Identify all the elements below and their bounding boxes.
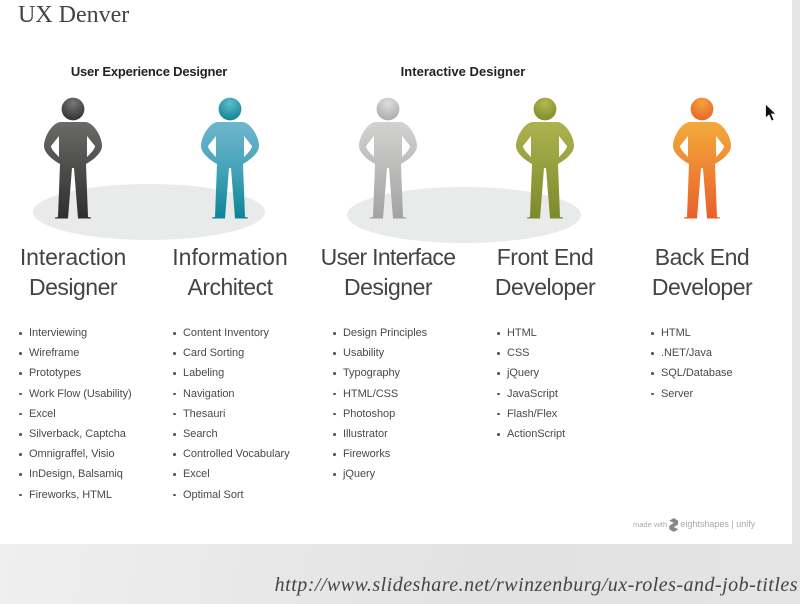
- skill list: back end developer: HTML: [661, 327, 691, 339]
- role name: interaction designer: [20, 244, 126, 300]
- figure: user interface designer: [359, 98, 417, 218]
- skill list: interaction designer: [19, 327, 132, 501]
- credit: made with eightshapes unify: made with eightshapes | unify: [633, 519, 755, 529]
- skill list: user interface designer: [333, 327, 427, 480]
- skill list: information architect: Optimal Sort: [183, 489, 244, 501]
- figure: front end developer: [516, 98, 574, 218]
- skill list: information architect: Search: [183, 428, 218, 440]
- skill list: interaction designer: Excel: [29, 408, 56, 420]
- skill list: back end developer: SQL/Database: [661, 367, 733, 379]
- figure: interaction designer: [44, 98, 102, 218]
- source url caption: http://www.slideshare.net/rwinzenburg/ux-roles-and-job-titles: [275, 574, 798, 596]
- skill list: interaction designer: Omnigraffel, Visio: [29, 448, 115, 460]
- skill list: front end developer: ActionScript: [507, 428, 565, 440]
- role name: front end developer: [495, 244, 596, 300]
- role name: information architect: Architect: [188, 274, 272, 300]
- role name: back end developer: [652, 244, 752, 300]
- skill list: information architect: Controlled Vocabulary: [183, 448, 290, 460]
- skill list: front end developer: Flash/Flex: [507, 408, 557, 420]
- skill list: front end developer: HTML: [507, 327, 537, 339]
- skill list: information architect: Labeling: [183, 367, 224, 379]
- illustration: figures and ground shadows: [33, 98, 731, 243]
- skill list: interaction designer: Wireframe: [29, 347, 79, 359]
- skill list: user interface designer: jQuery: [343, 468, 375, 480]
- skill list: front end developer: JavaScript: [507, 388, 558, 400]
- role name: front end developer: Front End: [497, 244, 593, 270]
- skill list: interaction designer: Fireworks, HTML: [29, 489, 112, 501]
- skill list: back end developer: .NET/Java: [661, 347, 712, 359]
- role name: back end developer: Back End: [655, 244, 749, 270]
- skill list: back end developer: [651, 327, 733, 400]
- skill list: interaction designer: InDesign, Balsamiq: [29, 468, 123, 480]
- heading: user experience designer: User Experience Designer: [71, 64, 227, 79]
- skill list: information architect: Excel: [183, 468, 210, 480]
- role name: user interface designer: User Interface: [321, 244, 455, 270]
- role name: user interface designer: Designer: [344, 274, 432, 300]
- skill list: interaction designer: Prototypes: [29, 367, 81, 379]
- role name: front end developer: Developer: [495, 274, 595, 300]
- skill list: information architect: Thesauri: [183, 408, 225, 420]
- skill list: back end developer: Server: [661, 388, 693, 400]
- figure: information architect: [201, 98, 259, 218]
- skill list: user interface designer: Fireworks: [343, 448, 390, 460]
- skill list: front end developer: jQuery: [507, 367, 539, 379]
- skill list: front end developer: CSS: [507, 347, 529, 359]
- skill list: front end developer: [497, 327, 566, 440]
- role name: interaction designer: Interaction: [20, 244, 126, 270]
- skill list: user interface designer: Illustrator: [343, 428, 388, 440]
- skill list: user interface designer: HTML/CSS: [343, 388, 398, 400]
- ground shadow: right pair: [347, 187, 581, 243]
- bottom band: [0, 544, 800, 604]
- skill list: user interface designer: Photoshop: [343, 408, 395, 420]
- skill list: interaction designer: Interviewing: [29, 327, 87, 339]
- role name: user interface designer: [321, 244, 455, 300]
- skill list: information architect: Content Inventory: [183, 327, 269, 339]
- role name: information architect: Information: [172, 244, 288, 270]
- skill list: user interface designer: Design Principles: [343, 327, 427, 339]
- role name: information architect: [172, 244, 288, 300]
- skill list: interaction designer: Silverback, Captcha: [29, 428, 126, 440]
- role name: interaction designer: Designer: [29, 274, 117, 300]
- skill list: information architect: Card Sorting: [183, 347, 244, 359]
- figure: back end developer: [673, 98, 731, 218]
- title: UX Denver: [18, 2, 129, 28]
- skill list: user interface designer: Typography: [343, 367, 400, 379]
- heading: interactive designer: Interactive Designer: [401, 64, 525, 79]
- skill list: interaction designer: Work Flow (Usability): [29, 388, 132, 400]
- role name: back end developer: Developer: [652, 274, 752, 300]
- skill list: information architect: Navigation: [183, 388, 234, 400]
- skill list: information architect: [173, 327, 290, 501]
- ground shadow: left pair: [33, 184, 265, 240]
- skill list: user interface designer: Usability: [343, 347, 384, 359]
- icon: mouse cursor: [766, 105, 775, 120]
